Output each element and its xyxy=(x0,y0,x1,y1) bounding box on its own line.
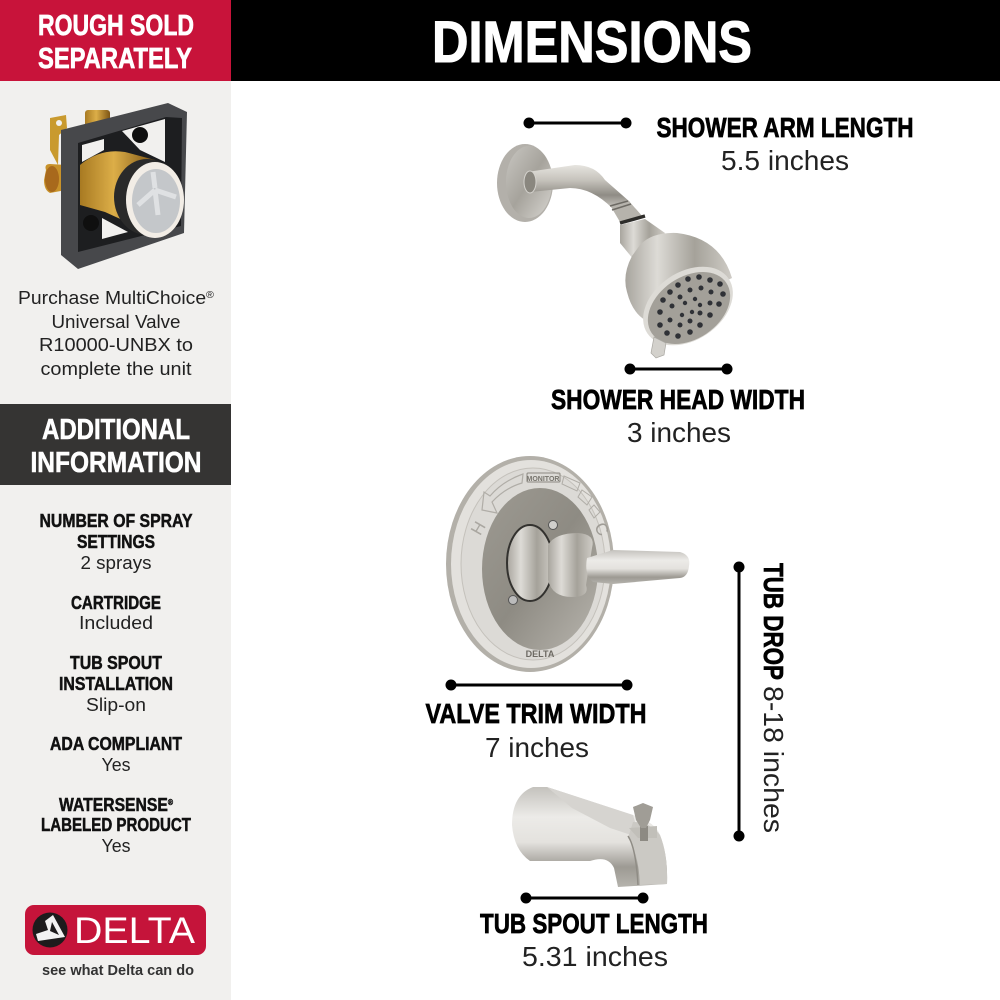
arrow: tub drop xyxy=(734,562,744,842)
text: purchase note xyxy=(18,288,215,379)
header: rough sold separately: ROUGH SOLD xyxy=(38,10,194,42)
label: tub drop xyxy=(758,563,789,833)
text: ada compliant: ADA COMPLIANT xyxy=(50,734,182,754)
text: watersense labeled product: WATERSENSE xyxy=(59,795,184,815)
label: shower head width: 3 inches xyxy=(627,417,731,448)
panel: sidebar background xyxy=(0,0,231,1000)
image: valve trim xyxy=(446,456,689,672)
header: additional information: ADDITIONAL xyxy=(42,414,190,446)
header: additional information xyxy=(0,404,231,485)
text: purchase note: ® xyxy=(206,290,215,301)
arrow: tub spout length xyxy=(520,892,648,904)
label: valve trim width: VALVE TRIM WIDTH xyxy=(426,698,646,729)
label: shower arm length xyxy=(656,112,914,176)
text: number of spray settings: 2 sprays xyxy=(80,553,152,573)
text: number of spray settings: SETTINGS xyxy=(77,532,155,552)
title: dimensions: DIMENSIONS xyxy=(432,10,752,75)
label: shower head width xyxy=(551,384,805,448)
label: tub spout length: 5.31 inches xyxy=(522,941,668,972)
text: watersense labeled product xyxy=(41,795,191,856)
text: cartridge xyxy=(71,593,161,633)
text: number of spray settings xyxy=(40,511,192,573)
text: purchase note: Purchase MultiChoice xyxy=(18,288,193,308)
title: dimensions xyxy=(231,0,1000,81)
text: purchase note: Universal Valve xyxy=(52,312,180,332)
label: valve trim width xyxy=(426,698,646,763)
label: shower arm length: 5.5 inches xyxy=(721,145,849,176)
text: tub spout installation xyxy=(59,653,173,715)
image: valve trim: DELTA xyxy=(526,649,555,659)
arrow: shower arm length xyxy=(524,118,632,128)
text: purchase note: R10000-UNBX to xyxy=(39,335,193,355)
text: tub spout installation: INSTALLATION xyxy=(59,674,173,694)
text: cartridge: Included xyxy=(79,613,153,633)
label: tub spout length xyxy=(480,908,708,972)
logo: Delta xyxy=(25,905,206,979)
text: tub spout installation: Slip-on xyxy=(86,695,146,715)
text: watersense labeled product: LABELED PRODUCT xyxy=(41,815,191,835)
text: cartridge: CARTRIDGE xyxy=(71,593,161,613)
text: tub spout installation: TUB SPOUT xyxy=(70,653,162,673)
header: rough sold separately xyxy=(0,0,231,81)
arrow: valve trim width xyxy=(446,680,632,690)
image: valve trim: MONITOR xyxy=(527,476,559,483)
label: shower head width: SHOWER HEAD WIDTH xyxy=(551,384,805,415)
label: valve trim width: 7 inches xyxy=(485,732,589,763)
label: tub drop: TUB DROP xyxy=(758,563,789,680)
image: tub spout xyxy=(512,787,667,887)
logo: Delta: DELTA xyxy=(74,910,195,951)
text: watersense labeled product: Yes xyxy=(102,836,130,856)
text: ada compliant: Yes xyxy=(102,755,130,775)
label: tub spout length: TUB SPOUT LENGTH xyxy=(480,908,708,939)
text: purchase note: complete the unit xyxy=(40,359,192,379)
text: watersense labeled product: ® xyxy=(168,798,173,807)
text: number of spray settings: NUMBER OF SPRAY xyxy=(40,511,192,531)
header: rough sold separately: SEPARATELY xyxy=(38,43,192,75)
header: additional information: INFORMATION xyxy=(30,447,202,479)
logo: Delta: see what Delta can do xyxy=(42,962,194,979)
label: shower arm length: SHOWER ARM LENGTH xyxy=(656,112,914,143)
image: valve trim: C xyxy=(590,519,613,539)
image: shower head xyxy=(497,144,748,362)
label: tub drop: 8-18 inches xyxy=(758,686,789,833)
image: valve trim: H xyxy=(467,518,490,538)
text: ada compliant xyxy=(50,734,182,775)
arrow: shower head width xyxy=(624,364,732,374)
image: MultiChoice universal valve xyxy=(44,103,187,269)
